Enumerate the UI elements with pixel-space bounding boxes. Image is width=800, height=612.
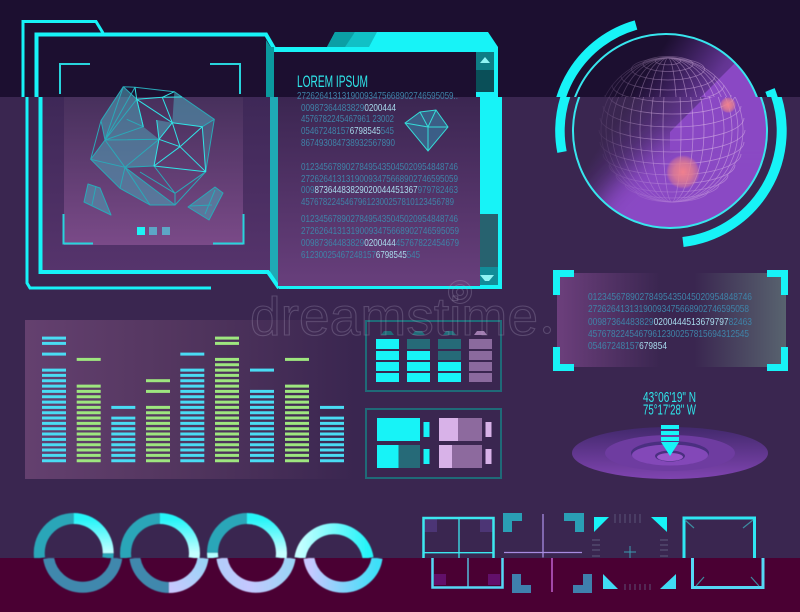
data panel background	[557, 273, 786, 367]
cyan batteries	[377, 418, 430, 468]
frame side strip	[266, 40, 278, 288]
digit block 1: 27262641313190093475668902746595059..	[297, 90, 458, 102]
data digits: 27262641313190093475668902746595058	[588, 303, 749, 315]
peak markers blue	[42, 337, 344, 409]
crystal wireframe	[84, 87, 223, 220]
coordinates label	[643, 390, 696, 418]
location ripple with pin	[572, 425, 768, 479]
icon: location pin arrow	[661, 425, 679, 456]
digit block 3: 27262641313190093475668902746595059	[301, 225, 459, 237]
panel: image viewer frame	[23, 22, 282, 288]
data digits: 45767822454679612300257815694312545	[588, 328, 749, 340]
coordinates label: 75°17'28" W	[643, 402, 696, 418]
digit block 1	[297, 90, 458, 149]
icon: diamond	[405, 110, 448, 151]
watermark: dreamstime	[250, 287, 538, 347]
digit block 2: 01234567890278495435045020954848746	[301, 161, 458, 173]
radar globe	[556, 25, 800, 250]
blue bars	[54, 369, 332, 462]
data digits: 05467248157679854	[588, 340, 667, 352]
bar chart: equalizer	[25, 320, 356, 479]
background: top dark band	[0, 0, 800, 97]
icon: target reticle	[592, 514, 676, 590]
digit block 3: 00987364483829020044445767822454679	[301, 237, 459, 249]
data digits	[588, 291, 752, 352]
frame outline	[36, 34, 282, 288]
ring 4	[300, 529, 377, 587]
panel: level meters	[366, 321, 501, 391]
meter tabs	[381, 331, 487, 335]
digit block 1: 4576782245467961 23002	[301, 113, 394, 125]
background: bottom maroon band	[0, 558, 800, 612]
digit block 3: 01234567890278495435045020954848746	[301, 213, 458, 225]
viewfinder brackets	[60, 64, 244, 244]
green bars	[89, 363, 297, 462]
icon: crosshair brackets	[503, 513, 592, 593]
panel: data readout	[553, 270, 788, 371]
meter columns	[376, 339, 492, 382]
digit block 1: 009873644838290200444	[301, 102, 396, 114]
digit block 2: 00987364483829020044451367979782463	[301, 184, 458, 196]
corner brackets	[553, 270, 788, 371]
meters frame	[366, 321, 501, 391]
icon: split window frame	[424, 518, 502, 588]
lilac batteries	[439, 418, 492, 468]
ring 3	[212, 518, 290, 587]
equalizer panel	[25, 320, 356, 479]
ring 1	[39, 518, 117, 587]
data digits: 00987364483829020044451367979782463	[588, 316, 752, 328]
digit block 2: 27262641313190093475668902746595059	[301, 173, 458, 185]
data digits: 01234567890278495435045020954848746	[588, 291, 752, 303]
digit block 1: 054672481576798545545	[301, 125, 394, 137]
digit block 3: 612300254672481576798545545	[301, 249, 420, 261]
scrollbar	[476, 52, 498, 285]
peak markers green	[77, 337, 309, 393]
inner panel gradient	[64, 97, 243, 245]
readout frame	[270, 32, 502, 289]
icon: corner frame	[684, 518, 763, 588]
heading: LOREM IPSUM	[297, 73, 368, 91]
digit block 1: 867493084738932567890	[301, 137, 395, 149]
digit block 2	[301, 161, 458, 208]
coordinates label: 43°06'19" N	[643, 390, 696, 406]
split window upper half	[424, 518, 494, 558]
pagination dots	[137, 227, 170, 235]
split window lower half	[432, 558, 502, 588]
ring 2	[126, 518, 203, 588]
digit block 3	[301, 213, 459, 261]
panel: text readout	[270, 32, 502, 289]
readout body	[278, 97, 480, 286]
panel: battery indicators	[366, 409, 501, 478]
frame background	[42, 97, 270, 271]
batteries frame	[366, 409, 501, 478]
outer bracket line	[23, 22, 211, 288]
digit block 2: 45767822454679612300257810123456789	[301, 196, 454, 208]
progress rings	[39, 518, 377, 588]
